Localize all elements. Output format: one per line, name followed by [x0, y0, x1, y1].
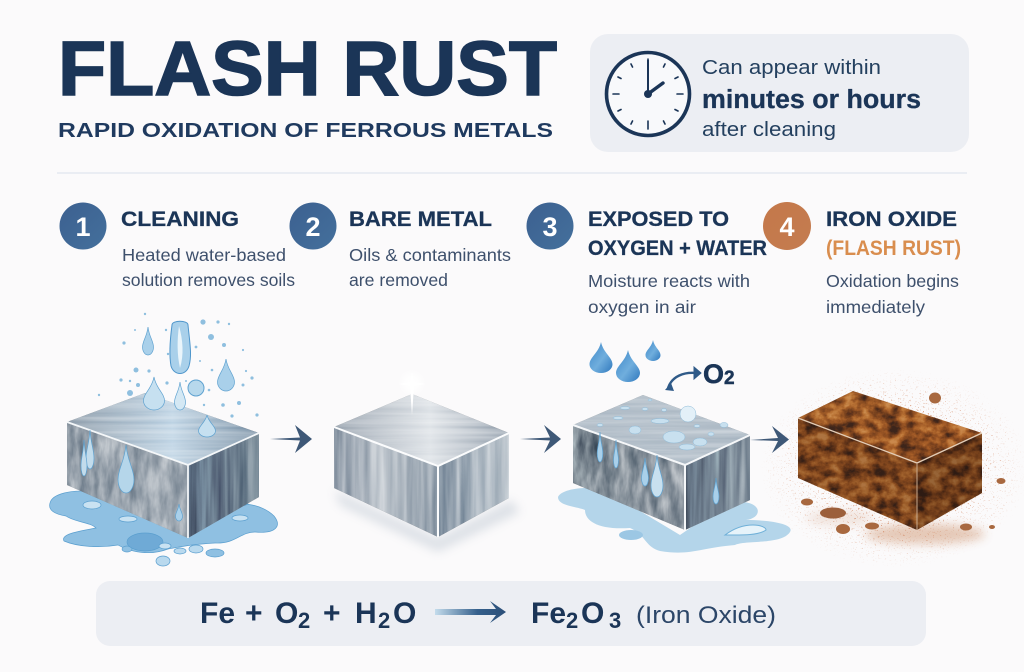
step 2 label: [290, 202, 511, 290]
block left face: [334, 427, 438, 537]
equation reactants: 2: [378, 608, 390, 633]
step 1 label: 1: [75, 212, 91, 242]
block right face: [685, 435, 750, 530]
panel: timing callout: [590, 34, 969, 152]
block right face: [438, 433, 509, 537]
heading: exposed: EXPOSED TO: [588, 208, 729, 231]
block top: [798, 391, 982, 463]
description: iron oxide: Oxidation begins: [826, 271, 959, 291]
arrow 2: [520, 425, 561, 453]
step 4 label: immediately: [826, 297, 925, 317]
step 4 label: 4: [779, 212, 795, 242]
oxygen label with curved arrow: O: [703, 359, 724, 389]
step 2 label: 2: [305, 212, 321, 242]
surface droplets: [597, 399, 728, 450]
equation reactants: +: [323, 597, 341, 630]
rust flakes: [801, 392, 1006, 534]
callout text: Can appear within: [702, 56, 881, 79]
illustration: bare metal block: [334, 369, 520, 552]
drips: [81, 430, 182, 521]
illustration: wet metal block: [50, 313, 277, 566]
equation product: 3: [609, 608, 621, 633]
equation reactants: 2: [298, 608, 310, 633]
badge 4: [763, 202, 811, 250]
icon: clock: [606, 52, 690, 136]
equation product: O: [581, 597, 604, 630]
panel: chemical equation: [96, 581, 926, 646]
step 3 label: OXYGEN + WATER: [588, 237, 767, 260]
heading: iron oxide: IRON OXIDE: [826, 208, 957, 231]
step 3 label: oxygen in air: [588, 297, 696, 317]
puddle: [558, 488, 791, 553]
block right face: [917, 433, 982, 530]
product name: (Iron Oxide): [636, 602, 776, 629]
block left face: [573, 425, 685, 530]
equation arrow: [435, 601, 506, 623]
title: FLASH RUST: [58, 26, 557, 112]
block top: [573, 395, 750, 465]
step 3 label: [526, 202, 767, 317]
illustration: rusted block: [760, 368, 1024, 568]
puddle: [50, 491, 277, 566]
badge 1: [60, 202, 106, 250]
shadow: [334, 490, 520, 552]
equation reactants: O: [393, 597, 416, 630]
block top: [334, 394, 509, 466]
badge 3: [526, 202, 574, 250]
equation reactants: O: [275, 597, 298, 630]
heading: cleaning: CLEANING: [121, 208, 239, 231]
step 2 label: are removed: [349, 270, 448, 290]
equation reactants: +: [245, 597, 263, 630]
shine sparkle: [398, 369, 426, 415]
description: cleaning: Heated water-based: [122, 245, 286, 265]
equation reactants: H: [355, 597, 377, 630]
block left face: [798, 418, 917, 530]
subtitle: RAPID OXIDATION OF FERROUS METALS: [58, 120, 553, 142]
callout text: after cleaning: [702, 118, 836, 141]
step 1 label: solution removes soils: [122, 270, 295, 290]
step 1 label: [60, 202, 295, 290]
block top: [67, 393, 259, 465]
block right face: [188, 433, 259, 538]
rust dust: [760, 368, 1024, 568]
equation product: 2: [566, 608, 578, 633]
arrow 1: [270, 425, 312, 453]
illustration: block exposed to oxygen and water: [558, 340, 791, 553]
badge 2: [290, 202, 336, 250]
blue water drops: [590, 340, 660, 382]
callout text: minutes or hours: [702, 86, 921, 114]
water spray dots: [98, 313, 259, 418]
arrow 3: [750, 426, 789, 453]
equation reactants: Fe: [200, 597, 235, 630]
step 4 label: [763, 202, 961, 317]
equation product: Fe: [531, 597, 566, 630]
heading: bare metal: BARE METAL: [349, 208, 492, 231]
step 3 label: 3: [542, 212, 558, 242]
oxygen label with curved arrow: 2: [724, 368, 735, 389]
description: bare metal: Oils & contaminants: [349, 245, 511, 265]
step 4 label: (FLASH RUST): [826, 237, 961, 260]
oxygen label with curved arrow: [665, 359, 735, 391]
block left face: [67, 422, 188, 538]
callout text: [702, 56, 921, 141]
falling water drops: [142, 321, 234, 437]
drips: [597, 432, 719, 504]
description: exposed: Moisture reacts with: [588, 271, 750, 291]
